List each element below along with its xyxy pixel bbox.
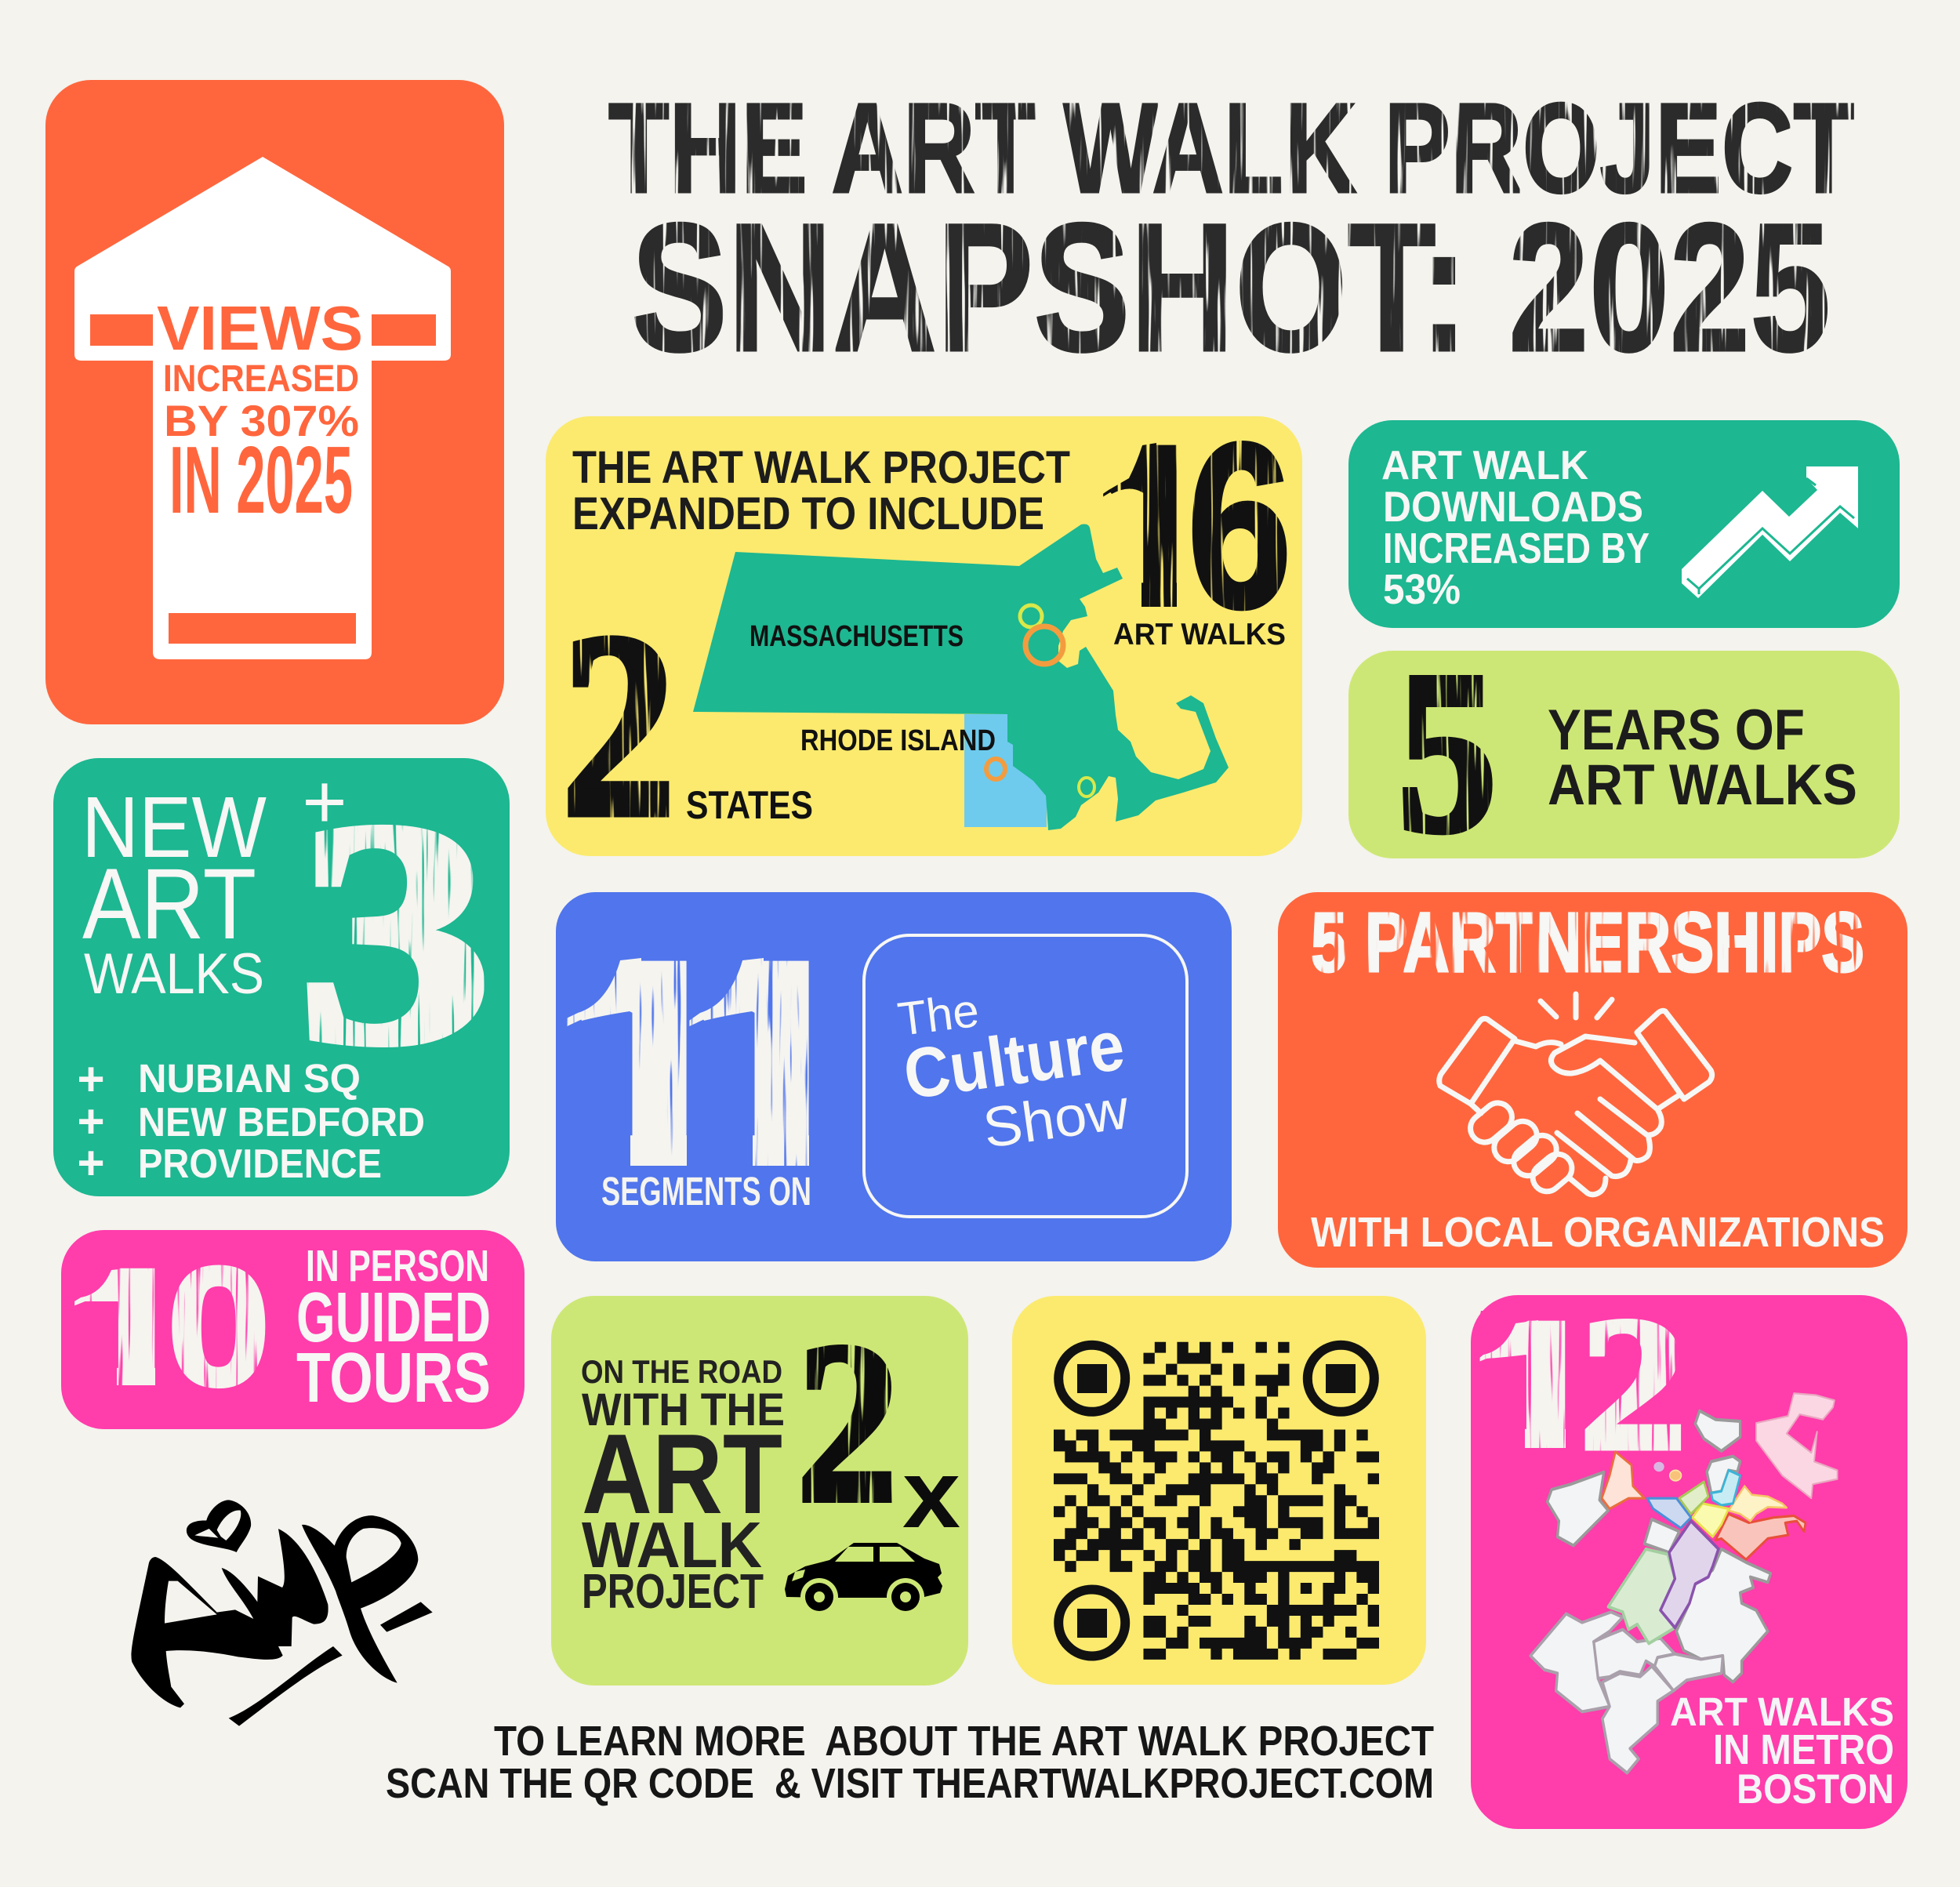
text: views increased by 307% in 2025	[157, 293, 363, 533]
icon: up arrow	[74, 157, 451, 659]
text: views increased by 307% in 2025: VIEWS	[157, 293, 363, 363]
text: downloads increased by 53%: DOWNLOADS	[1383, 482, 1643, 531]
list: new locations: PROVIDENCE	[138, 1141, 382, 1187]
map labels: MASSACHUSETTS	[750, 620, 964, 653]
text: on the road with the art walk project: WALK	[582, 1508, 762, 1581]
list: new locations: NEW BEDFORD	[138, 1100, 425, 1145]
text: on the road with the art walk project: WITH THE	[582, 1384, 785, 1435]
list: new locations: +	[77, 1053, 105, 1105]
panel: on the road	[551, 1296, 968, 1686]
map: art walk location rings	[986, 605, 1094, 797]
stat: 16 art walks: 6	[1187, 394, 1292, 657]
numeral: 2x: 2	[797, 1296, 900, 1550]
panel: culture show	[540, 892, 1232, 1261]
heading: new art walks: ART	[82, 848, 256, 960]
heading: new art walks	[82, 779, 267, 1006]
text: in person guided tours: TOURS	[296, 1339, 491, 1417]
stat: 16 art walks: 1	[1087, 394, 1221, 657]
footer call to action: TO LEARN MORE ABOUT THE ART WALK PROJECT	[494, 1718, 1434, 1765]
numeral: 12: 1	[1461, 1281, 1617, 1488]
numeral: 12	[1461, 1278, 1687, 1490]
map: Boston neighborhoods	[1530, 1393, 1838, 1773]
text: on the road with the art walk project: ON THE ROAD	[581, 1353, 782, 1390]
stat: 16 art walks	[1087, 394, 1292, 657]
icon: car	[785, 1543, 942, 1616]
map: Rhode Island	[964, 714, 1047, 827]
text: art walks in metro Boston: ART WALKS	[1670, 1689, 1894, 1734]
stat: 2 states	[561, 579, 813, 871]
list: new locations	[77, 1053, 425, 1189]
panel: QR code	[1012, 1296, 1426, 1685]
panel: expansion map	[546, 394, 1302, 871]
map labels	[750, 620, 996, 757]
list: new locations: +	[77, 1095, 105, 1148]
numeral: 12: 2	[1579, 1278, 1687, 1490]
heading: expanded to include: EXPANDED TO INCLUDE	[572, 488, 1044, 539]
text: downloads increased by 53%: ART WALK	[1381, 443, 1588, 488]
text: years of art walks: ART WALKS	[1548, 753, 1857, 817]
numeral: 5: 5	[1398, 624, 1497, 880]
icon: rising arrow	[1682, 466, 1858, 598]
logo: the culture show: Show	[979, 1078, 1133, 1160]
QR finder marks	[1058, 1345, 1374, 1656]
panel: partnerships	[1278, 892, 1907, 1268]
footer call to action: SCAN THE QR CODE & VISIT THEARTWALKPROJECT.COM	[386, 1760, 1434, 1807]
text: on the road with the art walk project: PROJECT	[582, 1565, 764, 1619]
panel: 5 years	[1348, 624, 1900, 880]
heading: new art walks: NEW	[82, 779, 267, 876]
text: downloads increased by 53%: INCREASED BY	[1383, 524, 1650, 572]
footer call to action	[386, 1718, 1434, 1807]
numeral: 11	[540, 896, 882, 1229]
numeral: 3: 3	[297, 756, 493, 1110]
text: downloads increased by 53%	[1381, 443, 1650, 613]
text: with local organizations: WITH LOCAL ORGANIZATIONS	[1311, 1209, 1885, 1256]
numeral: 10	[56, 1232, 271, 1421]
text: art walks in metro Boston: BOSTON	[1737, 1766, 1894, 1813]
text: downloads increased by 53%: 53%	[1383, 566, 1461, 613]
text: in person guided tours: GUIDED	[296, 1279, 491, 1357]
text: views increased by 307% in 2025: INCREASED	[163, 358, 359, 400]
title	[608, 76, 1854, 390]
map labels: RHODE ISLAND	[800, 724, 996, 757]
numeral: 10: 0	[166, 1232, 271, 1421]
text: segments on: SEGMENTS ON	[601, 1169, 811, 1214]
icon: plus: +	[302, 758, 347, 844]
panel: new art walks	[53, 756, 510, 1196]
stat: 2 states: 2	[561, 579, 676, 871]
text: art walks in metro Boston: IN METRO	[1713, 1726, 1894, 1773]
QR modules	[1054, 1342, 1379, 1660]
stat: 16 art walks: ART WALKS	[1113, 618, 1286, 651]
text: art walks in metro Boston	[1670, 1689, 1894, 1813]
panel: downloads	[1348, 420, 1900, 628]
panel: metro Boston	[1461, 1278, 1907, 1829]
logo: the culture show	[864, 935, 1187, 1217]
list: new locations: +	[77, 1137, 105, 1189]
icon: handshake	[1439, 994, 1712, 1197]
text: on the road with the art walk project	[581, 1353, 785, 1619]
logo: the culture show: The	[895, 984, 982, 1046]
logo: the culture show: Culture	[899, 1007, 1129, 1115]
numeral: 10: 1	[56, 1232, 204, 1421]
stat: 2 states: STATES	[686, 783, 813, 827]
text: years of art walks: YEARS OF	[1548, 699, 1805, 762]
logo: AWP graffiti tag with heart	[132, 1500, 433, 1726]
text: in person guided tours: IN PERSON	[306, 1241, 489, 1291]
text: views increased by 307% in 2025: BY 307%	[164, 396, 359, 445]
heading: expanded to include	[572, 442, 1070, 539]
list: new locations: NUBIAN SQ	[138, 1056, 361, 1101]
numeral: 2x: x	[902, 1441, 960, 1548]
panel: views increased	[45, 80, 504, 724]
heading: expanded to include: THE ART WALK PROJECT	[572, 442, 1070, 493]
numeral: 11: 1	[662, 896, 882, 1229]
numeral: 11: 1	[540, 896, 760, 1229]
text: on the road with the art walk project: ART	[582, 1410, 782, 1537]
panel: guided tours	[56, 1230, 524, 1429]
heading: new art walks: WALKS	[84, 942, 264, 1006]
text: views increased by 307% in 2025: IN 2025	[169, 426, 353, 533]
text: years of art walks	[1548, 699, 1857, 817]
text: in person guided tours	[296, 1241, 491, 1417]
map: Massachusetts	[693, 524, 1229, 830]
